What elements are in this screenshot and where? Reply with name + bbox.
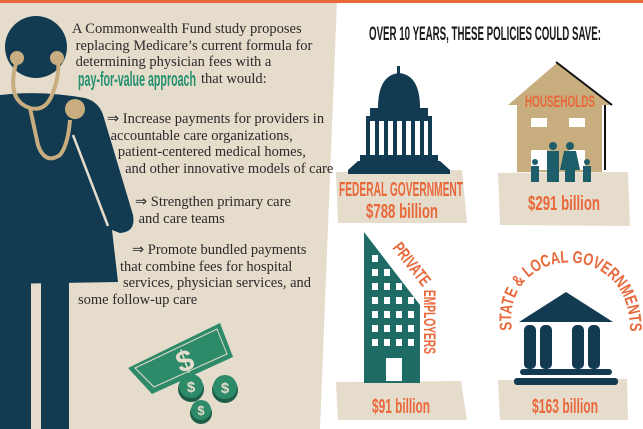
text block: bullet 1: accountable care organizations, bbox=[111, 128, 293, 144]
panel: state & local governments bbox=[498, 251, 642, 420]
text block: intro: determining physician fees with a bbox=[76, 54, 271, 70]
text block: bullet 1: patient-centered medical homes, bbox=[118, 144, 306, 160]
icon: money: $ bbox=[187, 379, 196, 396]
text block: bullet 2: and care teams bbox=[139, 211, 225, 227]
text: pay-for-value: pay-for-value approach bbox=[78, 69, 196, 91]
panel: state & local governments: STATE & LOCAL GOVERNMENTS bbox=[499, 251, 642, 331]
icon: stethoscope bbox=[12, 53, 85, 158]
panel: households bbox=[498, 62, 630, 226]
text block: intro: A Commonwealth Fund study proposes bbox=[72, 21, 302, 37]
text block: bullet 3: some follow-up care bbox=[78, 292, 197, 308]
panel: federal government: $788 billion bbox=[366, 201, 438, 223]
text block: bullet 3: ⇒ Promote bundled payments bbox=[132, 242, 306, 258]
text block: intro: that would: bbox=[201, 71, 267, 87]
panel: state & local governments: $163 billion bbox=[532, 396, 598, 418]
text block: bullet 1: ⇒ Increase payments for providers in bbox=[107, 111, 324, 127]
text block: bullet 3: that combine fees for hospital bbox=[120, 259, 292, 275]
panel: households: $291 billion bbox=[528, 193, 600, 215]
panel: private employers bbox=[336, 232, 467, 420]
icon: money: $ bbox=[221, 380, 230, 397]
background: left beige panel bbox=[0, 0, 337, 429]
panel: private employers: $91 billion bbox=[372, 396, 430, 418]
text block: bullet 1: and other innovative models of care bbox=[125, 161, 333, 177]
panel: households: HOUSEHOLDS bbox=[525, 92, 595, 111]
icon: money bbox=[128, 323, 238, 424]
text block: bullet 2 bbox=[135, 194, 291, 227]
text block: bullet 3 bbox=[78, 242, 311, 308]
panel: federal government: FEDERAL GOVERNMENT bbox=[339, 179, 463, 201]
panel: federal government bbox=[336, 66, 467, 223]
text block: bullet 2: ⇒ Strengthen primary care bbox=[135, 194, 291, 210]
text block: intro bbox=[72, 21, 312, 87]
text block: bullet 1 bbox=[107, 111, 333, 177]
icon: money: $ bbox=[172, 343, 199, 380]
text block: bullet 3: services, physician services, and bbox=[123, 275, 311, 291]
panel: private employers: PRIVATE bbox=[389, 239, 435, 290]
text block: intro: replacing Medicare’s current formula for bbox=[76, 38, 312, 54]
icon: doctor figure bbox=[0, 16, 133, 429]
panel: private employers: EMPLOYERS bbox=[420, 290, 439, 354]
icon: money: $ bbox=[197, 403, 205, 418]
